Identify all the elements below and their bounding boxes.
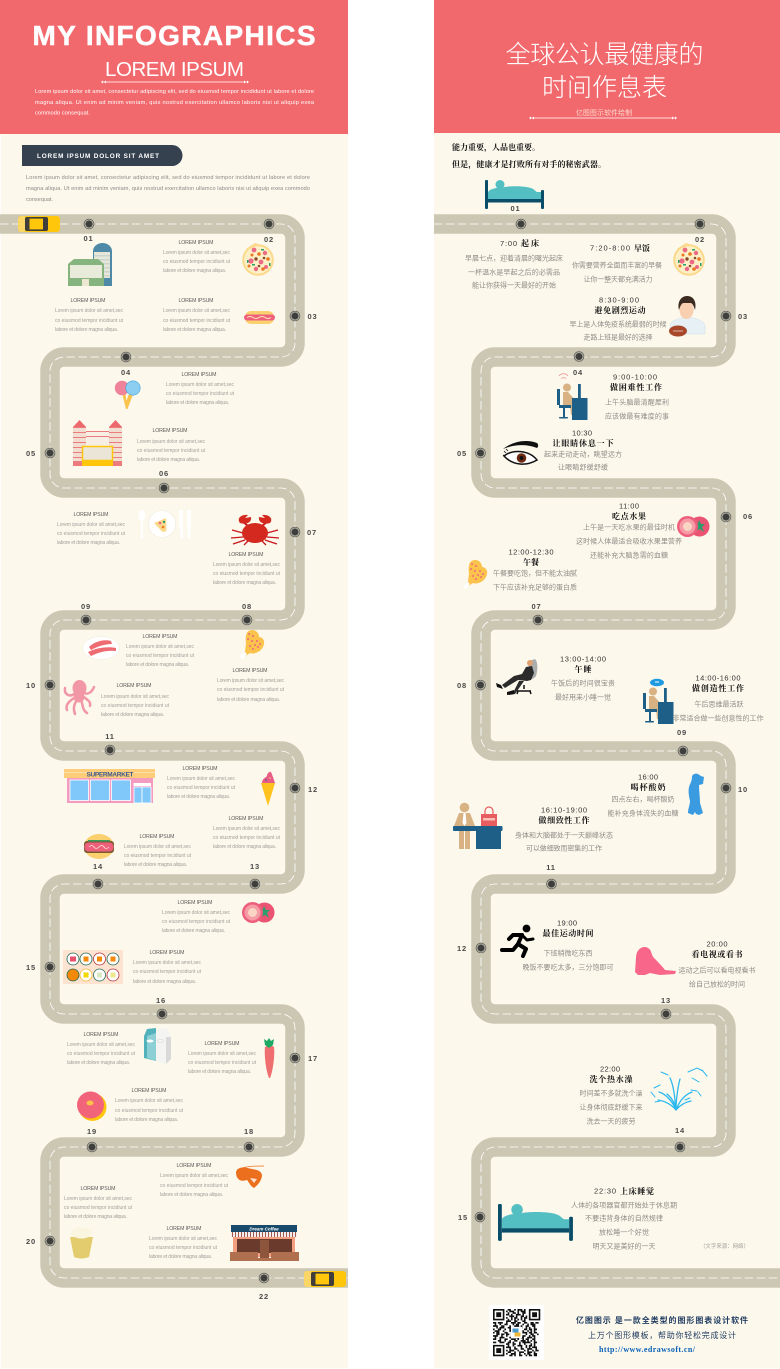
step: 16:00 yogurt: 喝杯酸奶 <box>630 782 666 793</box>
step: 16:00 yogurt: 16:00 <box>638 772 658 782</box>
step: 9:00 hard work: 上午头脑最清醒犀利 <box>605 398 669 406</box>
title: MY INFOGRAPHICS: MY INFOGRAPHICS <box>32 20 316 51</box>
step: 16:10 detailed work: 16:10-19:00 <box>541 806 587 814</box>
icon: drink cup <box>70 1228 93 1258</box>
step: 11:00 fruit: 11:00 <box>619 502 639 510</box>
text block: 10b: labore et dolore magna aliqua. <box>101 712 164 718</box>
text block: 08: labore et dolore magna aliqua. <box>217 697 280 703</box>
step: 9:00 hard work <box>605 372 669 420</box>
text block: 16: co eiusmod tempor incidiunt ut <box>67 1051 136 1057</box>
icon: chicken leg <box>240 630 264 659</box>
step: 8:30 commute <box>570 296 666 342</box>
step: 14:00 creative work: 午后思维最活跃 <box>694 700 744 708</box>
icon: office buildings <box>68 243 112 286</box>
step: 22:00 shower: 洗去一天的疲劳 <box>586 1116 636 1126</box>
text block: 19: Lorem ipsum dolor sit amet,sec <box>115 1098 184 1104</box>
text block: 21 <box>149 1226 218 1260</box>
step: 8:30 commute: 早上是人体免疫系统最弱的时候 <box>570 320 666 328</box>
route markers and numbers: 05 <box>457 449 467 458</box>
text block: 18: labore et dolore magna aliqua. <box>160 1192 223 1198</box>
text block: 07 <box>213 552 281 586</box>
icon: man with football <box>669 296 705 336</box>
step: 22:30 bed time: 不要违背身体的自然规律 <box>585 1214 663 1222</box>
text block: 15b <box>133 950 202 985</box>
step: 16:10 detailed work <box>515 806 613 852</box>
step: 20:00 TV and reading: 看电视或看书 <box>692 949 744 960</box>
intro statement: 能力重要，人品也重要。 <box>452 142 540 153</box>
text block: 18: LOREM IPSUM <box>176 1163 212 1169</box>
text block: 10b: Lorem ipsum dolor sit amet,sec <box>101 694 170 700</box>
route markers and numbers: 11 <box>546 863 556 872</box>
icon: worker with thought cloud <box>643 679 674 724</box>
step: 7:00 get up: 7:00 <box>500 239 517 248</box>
step: 16:10 detailed work: 可以做细致而密集的工作 <box>526 844 602 852</box>
section pill heading: LOREM IPSUM DOLOR SIT AMET <box>37 153 159 160</box>
icon: plate with cutlery <box>138 510 191 538</box>
header description: Lorem ipsum dolor sit amet, consectetur adipiscing elit, sed do eiusmod tempor incididunt ut labore et dolore <box>35 89 314 95</box>
step: 12:00 lunch: 午餐要吃饱，但不能太油腻 <box>493 568 577 578</box>
text block: 20: co eiusmod tempor incidiunt ut <box>64 1205 133 1211</box>
text block: 04 <box>166 372 235 406</box>
route markers and numbers: 15 <box>26 963 36 972</box>
route markers and numbers: 08 <box>457 681 467 690</box>
step: 12:00 lunch <box>493 548 577 592</box>
promo text: 上万个图形模板，帮助你轻松完成设计 <box>588 1330 736 1340</box>
text block: 15a: Lorem ipsum dolor sit amet,sec <box>162 910 230 916</box>
step: 14:00 creative work <box>672 674 764 722</box>
text block: 21: co eiusmod tempor incidiunt ut <box>149 1245 218 1251</box>
text block: 13: LOREM IPSUM <box>228 816 264 822</box>
text block: 04: Lorem ipsum dolor sit amet,sec <box>166 382 234 388</box>
step: 7:20 breakfast: 你需要营养全面而丰富的早餐 <box>572 260 662 270</box>
step: 22:00 shower: 洗个热水澡 <box>590 1074 632 1085</box>
step: 10:30 rest eyes <box>544 428 622 472</box>
road: daily route <box>434 224 780 1278</box>
text block: 16 <box>67 1032 136 1066</box>
step: 7:00 get up: 早晨七点，迎着清晨的曙光起床 <box>465 254 563 262</box>
intro paragraph: magna aliqua. Ut enim ad minim veniam, quis nostrud exercitation ullamco laboris nisi ut aliquip exea commodo <box>26 186 310 192</box>
route markers and numbers: 18 <box>244 1127 254 1136</box>
icon: person drinking <box>688 774 704 815</box>
text block: 21: LOREM IPSUM <box>166 1226 202 1232</box>
icon: worker at desk with signal <box>557 374 588 420</box>
text block: 13: labore et dolore magna aliqua. <box>213 844 276 850</box>
road: winding route <box>0 224 348 1278</box>
route markers and numbers: 14 <box>675 1126 685 1135</box>
icon: coffee shop <box>230 1225 299 1261</box>
step: 22:30 bed time: 上床睡觉 <box>620 1186 654 1197</box>
icon: octopus <box>65 680 94 714</box>
step: 19:00 exercise: 下班稍微吃东西 <box>544 948 592 958</box>
icon: red crab <box>231 515 279 545</box>
header band: left <box>0 0 348 134</box>
route markers and numbers: 15 <box>458 1213 468 1222</box>
icon: sushi tray <box>63 950 123 984</box>
text block: 06: Lorem ipsum dolor sit amet,sec <box>57 522 126 528</box>
text block: 02: co eiusmod tempor incidiunt ut <box>163 259 231 265</box>
icon: castle building <box>73 420 122 466</box>
text block: 21: labore et dolore magna aliqua. <box>149 1254 212 1260</box>
text block: 03: Lorem ipsum dolor sit amet,sec <box>163 308 230 314</box>
text block: 20: LOREM IPSUM <box>80 1186 116 1192</box>
text block: 15b: co eiusmod tempor incidiunt ut <box>133 969 202 975</box>
text block: 05: LOREM IPSUM <box>152 428 188 434</box>
text block: 05: labore et dolore magna aliqua. <box>137 457 200 463</box>
step: 7:00 get up: 能让你获得一天最好的开始 <box>472 280 556 290</box>
header band: right <box>434 0 780 133</box>
route markers and numbers: 22 <box>259 1292 269 1301</box>
text block: 16: LOREM IPSUM <box>84 1032 118 1038</box>
text block: 17 <box>188 1041 257 1075</box>
text block: 03 <box>163 298 231 333</box>
subtitle: LOREM IPSUM: LOREM IPSUM <box>105 58 244 81</box>
route markers and numbers: 05 <box>26 449 36 458</box>
icon: large bed <box>498 1204 573 1241</box>
step: 11:00 fruit: 吃点水果 <box>612 511 646 522</box>
text block: 11: co eiusmod tempor incidiunt ut <box>167 785 236 791</box>
step: 22:30 bed time: 放松睡一个好觉 <box>599 1228 649 1236</box>
step: 8:30 commute: 走路上班是最好的选择 <box>584 332 652 342</box>
step: 11:00 fruit: 这时候人体最适合吸收水果里营养 <box>576 536 682 546</box>
text block: 18: co eiusmod tempor incidiunt ut <box>160 1183 229 1189</box>
step: 13:00 nap: 13:00-14:00 <box>560 654 606 664</box>
step: 12:00 lunch: 12:00-12:30 <box>508 548 554 556</box>
step: 11:00 fruit: 上午是一天吃水果的最佳时机 <box>583 522 675 532</box>
route markers and numbers <box>457 204 753 1222</box>
text block: 11: labore et dolore magna aliqua. <box>167 794 230 800</box>
step: 20:00 TV and reading: 20:00 <box>706 940 728 948</box>
step: 20:00 TV and reading: 运动之后可以看电视看书 <box>678 966 756 974</box>
step: 19:00 exercise: 晚饭不要吃太多，三分饱即可 <box>522 962 614 972</box>
intro paragraph: Lorem ipsum dolor sit amet, consectetur adipiscing elit, sed do eiusmod tempor incididunt ut labore et dolore <box>26 175 310 181</box>
arrow divider <box>529 116 677 120</box>
text block: 06: co eiusmod tempor incidiunt ut <box>57 531 126 537</box>
arrow divider <box>101 80 249 84</box>
step: 22:30 bed time: 明天又是美好的一天 <box>592 1242 656 1250</box>
step: 8:30 commute: 避免剧烈运动 <box>594 305 646 316</box>
text block: 19: LOREM IPSUM <box>132 1088 166 1094</box>
route markers and numbers: 06 <box>159 469 169 478</box>
step: 16:00 yogurt <box>608 772 678 818</box>
icon: tomato slices <box>677 516 710 537</box>
promo text <box>576 1315 748 1354</box>
step: 22:30 bed time <box>571 1186 677 1250</box>
step: 12:00 lunch: 午餐 <box>523 557 539 568</box>
step: 11:00 fruit <box>576 502 682 560</box>
text block: 17: LOREM IPSUM <box>204 1041 240 1047</box>
QR code <box>489 1305 544 1360</box>
icon: milk cartons <box>144 1028 171 1064</box>
text block: 14: Lorem ipsum dolor sit amet,sec <box>124 844 192 850</box>
source note: （文字来源：网络） <box>700 1242 749 1250</box>
icon: chicken leg <box>463 560 487 589</box>
text block: 01: Lorem ipsum dolor sit amet,sec <box>55 308 124 314</box>
route markers and numbers: 14 <box>93 862 103 871</box>
step: 13:00 nap <box>551 654 615 702</box>
text block: 14 <box>124 834 192 868</box>
icon: coffee shop: Dream Coffee <box>249 1226 279 1232</box>
text block: 19: co eiusmod tempor incidiunt ut <box>115 1108 184 1114</box>
text block: 15a <box>162 900 231 934</box>
icon: man relaxing in chair <box>496 659 537 695</box>
step: 14:00 creative work: 非常适合做一些创意性的工作 <box>672 714 764 722</box>
route markers and numbers: 09 <box>81 602 91 611</box>
route markers and numbers: 01 <box>511 204 520 213</box>
text block: 07: Lorem ipsum dolor sit amet,sec <box>213 562 280 568</box>
text block: 08: LOREM IPSUM <box>232 668 268 674</box>
header description: commodo consequat. <box>35 110 90 116</box>
icon: small bed <box>485 180 544 209</box>
route markers and numbers: 04 <box>121 368 131 377</box>
text block: 02: Lorem ipsum dolor sit amet,sec <box>163 250 230 256</box>
text block: 07: co eiusmod tempor incidiunt ut <box>213 571 281 577</box>
text block: 13: Lorem ipsum dolor sit amet,sec <box>213 826 280 832</box>
icon: tomato slices <box>242 902 274 923</box>
step: 7:00 get up <box>465 238 563 290</box>
text block: 10a: co eiusmod tempor incidiunt ut <box>126 653 195 659</box>
text block: 15b: Lorem ipsum dolor sit amet,sec <box>133 960 202 966</box>
step: 13:00 nap: 最好用来小睡一觉 <box>555 692 611 702</box>
text block: 04: labore et dolore magna aliqua. <box>166 400 229 406</box>
step: 10:30 rest eyes: 让眼睛舒缓舒缓 <box>558 462 608 472</box>
step: 10:30 rest eyes: 10:30 <box>572 428 592 438</box>
text block: 19 <box>115 1088 184 1123</box>
step: 19:00 exercise: 19:00 <box>557 918 577 928</box>
text block: 10b <box>101 683 170 718</box>
text block: 10a: labore et dolore magna aliqua. <box>126 662 189 668</box>
route markers and numbers: 09 <box>677 728 687 737</box>
icon: taxi start <box>18 216 60 232</box>
header description: magna aliqua. Ut enim ad minim veniam, quis nostrud exercitation ullamco laboris nisi ut aliquip exea <box>35 100 315 106</box>
icon: ice cream cone <box>261 772 275 806</box>
route markers and numbers: 12 <box>308 785 318 794</box>
text block: 02: LOREM IPSUM <box>178 240 214 246</box>
route markers and numbers: 04 <box>573 368 583 377</box>
step: 10:30 rest eyes: 起来走动走动，眺望远方 <box>544 450 622 458</box>
text block: 06: LOREM IPSUM <box>74 512 108 518</box>
text block: 11 <box>167 766 236 800</box>
step: 22:00 shower: 让身体彻底舒缓下来 <box>580 1102 642 1112</box>
step: 22:30 bed time: 22:30 <box>594 1186 616 1196</box>
credit line: 亿图图示软件绘制 <box>576 108 632 117</box>
text block: 14: labore et dolore magna aliqua. <box>124 862 187 868</box>
step: 19:00 exercise: 最佳运动时间 <box>542 928 594 939</box>
icon: taxi end <box>304 1271 346 1287</box>
text block: 15b: labore et dolore magna aliqua. <box>133 979 196 985</box>
text block: 05 <box>137 428 206 463</box>
step: 9:00 hard work: 应该做最有难度的事 <box>605 412 669 420</box>
route markers and numbers: 02 <box>264 235 274 244</box>
text block: 20: Lorem ipsum dolor sit amet,sec <box>64 1196 132 1202</box>
text block: 02: labore et dolore magna aliqua. <box>163 268 226 274</box>
text block: 07: labore et dolore magna aliqua. <box>213 580 276 586</box>
text block: 15a: co eiusmod tempor incidiunt ut <box>162 919 231 925</box>
step: 22:00 shower: 22:00 <box>600 1064 620 1074</box>
icon: pizza <box>242 243 274 276</box>
route markers and numbers: 08 <box>242 602 252 611</box>
text block: 10b: LOREM IPSUM <box>116 683 152 689</box>
text block: 15a: labore et dolore magna aliqua. <box>162 928 225 934</box>
step: 7:00 get up: 一杯温水是早起之后的必需品 <box>468 268 560 276</box>
step: 10:30 rest eyes: 让眼睛休息一下 <box>552 438 614 449</box>
text block: 18: Lorem ipsum dolor sit amet,sec <box>160 1173 228 1179</box>
text block: 14: co eiusmod tempor incidiunt ut <box>124 853 192 859</box>
icon: hot dog <box>244 311 275 324</box>
route markers and numbers: 16 <box>156 996 166 1005</box>
text block: 05: co eiusmod tempor incidiunt ut <box>137 448 206 454</box>
step: 11:00 fruit: 还能补充大脑急需的血糖 <box>590 550 668 560</box>
text block: 17: co eiusmod tempor incidiunt ut <box>188 1060 257 1066</box>
text block: 13: co eiusmod tempor incidiunt ut <box>213 835 281 841</box>
text block: 11: Lorem ipsum dolor sit amet,sec <box>167 776 236 782</box>
panel: right infographic <box>434 0 780 1368</box>
text block: 11: LOREM IPSUM <box>182 766 218 772</box>
text block: 01: labore et dolore magna aliqua. <box>55 327 118 333</box>
step: 16:00 yogurt: 能补充身体流失的血糖 <box>608 808 678 818</box>
text block: 01: co eiusmod tempor incidiunt ut <box>55 318 124 324</box>
step: 9:00 hard work: 9:00-10:00 <box>613 372 657 382</box>
text block: 16: labore et dolore magna aliqua. <box>67 1060 130 1066</box>
step: 13:00 nap: 午睡 <box>574 664 592 675</box>
step: 7:00 get up: 起床 <box>521 238 539 249</box>
text block: 20: labore et dolore magna aliqua. <box>64 1214 127 1220</box>
text block: 10a: Lorem ipsum dolor sit amet,sec <box>126 644 194 650</box>
header description <box>35 89 315 116</box>
text block: 15b: LOREM IPSUM <box>150 950 184 956</box>
icon: donut <box>77 1092 106 1121</box>
icon: runner <box>502 925 533 956</box>
text block: 10a: LOREM IPSUM <box>142 634 178 640</box>
text block: 04: co eiusmod tempor incidiunt ut <box>166 391 235 397</box>
route markers and numbers: 13 <box>250 862 260 871</box>
route markers and numbers: 07 <box>307 528 317 537</box>
step: 13:00 nap: 午饭后的时间很宝贵 <box>551 678 615 688</box>
step: 19:00 exercise <box>522 918 614 972</box>
promo text: 亿图图示 是一款全类型的图形图表设计软件 <box>576 1315 748 1325</box>
intro statement <box>452 142 606 170</box>
step: 7:20 breakfast: 让你一整天都充满活力 <box>584 274 652 284</box>
intro paragraph <box>26 175 310 203</box>
route markers and numbers: 17 <box>308 1054 318 1063</box>
step: 20:00 TV and reading: 给自己放松的时间 <box>689 980 745 988</box>
title: 全球公认最健康的时间作息表: 全球公认最健康的 <box>506 41 704 69</box>
text block: 14: LOREM IPSUM <box>140 834 174 840</box>
text block: 08 <box>217 668 285 703</box>
route markers and numbers: 10 <box>738 785 748 794</box>
step: 7:20 breakfast <box>572 243 662 284</box>
promo text: http://www.edrawsoft.cn/ <box>599 1345 696 1354</box>
route markers and numbers: 06 <box>743 512 753 521</box>
text block: 18 <box>160 1163 229 1198</box>
text block: 07: LOREM IPSUM <box>228 552 264 558</box>
icon: shrimp <box>236 1166 264 1188</box>
text block: 04: LOREM IPSUM <box>182 372 216 378</box>
text block: 05: Lorem ipsum dolor sit amet,sec <box>137 439 206 445</box>
route markers and numbers: 01 <box>84 234 93 243</box>
step: 7:20 breakfast: 早饭 <box>634 243 650 254</box>
text block: 10a <box>126 634 195 668</box>
icon: double ice cream <box>115 381 140 409</box>
text block: 17: Lorem ipsum dolor sit amet,sec <box>188 1051 256 1057</box>
icon: person sitting <box>635 947 676 975</box>
route markers and numbers: 10 <box>26 681 36 690</box>
text block: 21: Lorem ipsum dolor sit amet,sec <box>149 1236 218 1242</box>
text block: 16: Lorem ipsum dolor sit amet,sec <box>67 1042 136 1048</box>
step: 12:00 lunch: 下午应该补充足够的蛋白质 <box>493 582 577 592</box>
route markers and numbers: 13 <box>661 996 671 1005</box>
step: 7:20 breakfast: 7:20-8:00 <box>590 244 630 252</box>
section pill heading <box>22 145 182 166</box>
route markers and numbers: 11 <box>105 732 115 741</box>
text block: 03: labore et dolore magna aliqua. <box>163 327 226 333</box>
text block: 06 <box>57 512 126 546</box>
icon: pizza <box>673 243 705 276</box>
icon: burger hot dog <box>84 834 114 859</box>
step: 16:00 yogurt: 四点左右，喝杯酸奶 <box>612 794 674 804</box>
text block: 01 <box>55 298 124 333</box>
route markers and numbers: 20 <box>26 1237 36 1246</box>
route markers and numbers: 03 <box>738 312 748 321</box>
text block: 13 <box>213 816 281 850</box>
text block: 03: co eiusmod tempor incidiunt ut <box>163 318 231 324</box>
text block: 01: LOREM IPSUM <box>70 298 106 304</box>
icon: woman at desk <box>453 803 502 849</box>
text block: 20 <box>64 1186 133 1220</box>
icon: sausage plate <box>82 636 120 660</box>
step: 20:00 TV and reading <box>678 940 756 988</box>
text block: 10b: co eiusmod tempor incidiunt ut <box>101 703 170 709</box>
icon: supermarket: SUPERMARKET <box>86 772 134 778</box>
route markers and numbers: 19 <box>87 1127 97 1136</box>
step: 22:00 shower: 时间差不多就洗个澡 <box>580 1088 642 1098</box>
step: 22:30 bed time: 人体的各项器官都开始处于休息期 <box>571 1200 677 1210</box>
text block: 15a: LOREM IPSUM <box>178 900 212 906</box>
route markers and numbers: 07 <box>532 602 541 611</box>
icon: water fountain <box>651 1068 707 1110</box>
step: 14:00 creative work: 做创造性工作 <box>692 683 744 694</box>
step: 8:30 commute: 8:30-9:00 <box>599 296 639 304</box>
step: 22:00 shower <box>580 1064 642 1126</box>
title: 全球公认最健康的时间作息表: 时间作息表 <box>542 74 667 102</box>
text block: 19: labore et dolore magna aliqua. <box>115 1117 178 1123</box>
step: 14:00 creative work: 14:00-16:00 <box>696 674 740 682</box>
route markers and numbers: 03 <box>308 312 317 321</box>
intro paragraph: consequat. <box>26 197 53 203</box>
icon: eye <box>503 441 538 464</box>
route markers and numbers <box>26 219 318 1301</box>
text block: 03: LOREM IPSUM <box>178 298 214 304</box>
text block: 06: labore et dolore magna aliqua. <box>57 540 120 546</box>
panel: left infographic <box>0 0 348 1368</box>
route markers and numbers: 12 <box>457 944 467 953</box>
text block: 02 <box>163 240 231 274</box>
title: 全球公认最健康的时间作息表 <box>506 41 704 102</box>
route markers and numbers: 02 <box>695 235 705 244</box>
step: 9:00 hard work: 做困难性工作 <box>610 382 662 393</box>
icon: supermarket <box>64 769 155 803</box>
text block: 08: Lorem ipsum dolor sit amet,sec <box>217 678 284 684</box>
icon: carrot <box>264 1038 274 1078</box>
text block: 17: labore et dolore magna aliqua. <box>188 1069 251 1075</box>
step: 16:10 detailed work: 身体和大脑都处于一天巅峰状态 <box>515 830 613 840</box>
text block: 08: co eiusmod tempor incidiunt ut <box>217 687 285 693</box>
step: 16:10 detailed work: 做细致性工作 <box>538 815 590 826</box>
intro statement: 但是，健康才是打败所有对手的秘密武器。 <box>452 159 606 170</box>
